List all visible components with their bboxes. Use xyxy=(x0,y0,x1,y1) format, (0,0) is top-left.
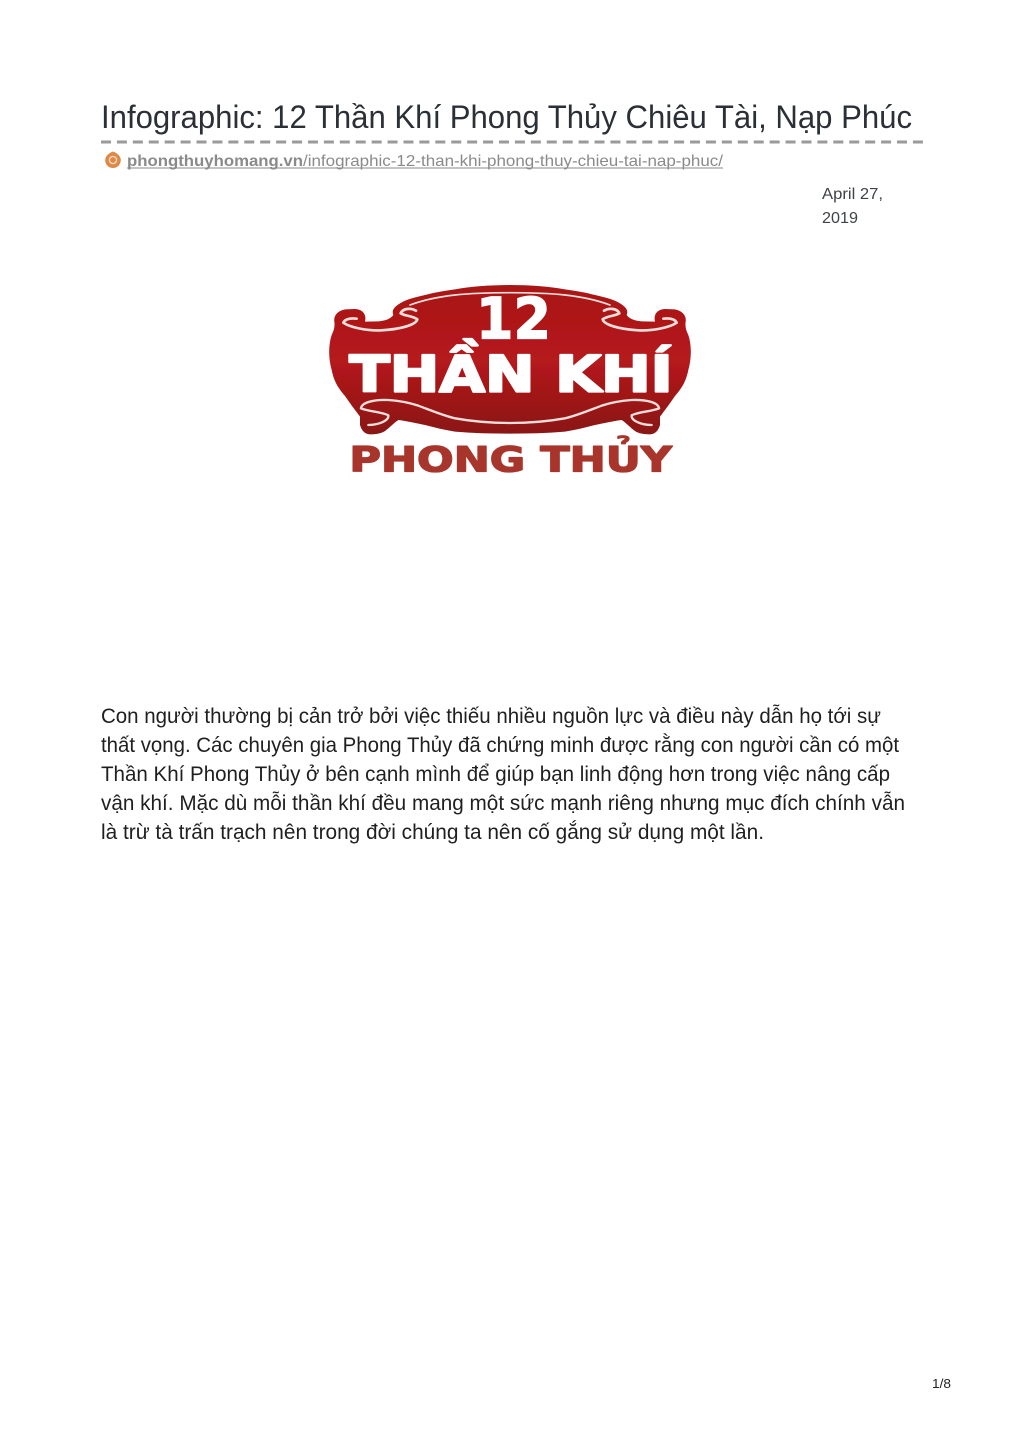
logo text phong thuy: PHONG THỦY xyxy=(349,437,673,481)
body paragraph: thất vọng. Các chuyên gia Phong Thủy đã chứng minh được rằng con người cần có một xyxy=(101,734,899,757)
icon: site favicon xyxy=(105,152,121,168)
dashed title divider xyxy=(101,140,923,144)
title: Infographic: 12 Thần Khí Phong Thủy Chiêu Tài, Nạp Phúc xyxy=(101,99,912,135)
body paragraph: Con người thường bị cản trở bởi việc thiếu nhiều nguồn lực và điều này dẫn họ tới sự xyxy=(101,705,881,728)
publication date: April 27, xyxy=(822,186,883,203)
logo number 12: 12 xyxy=(476,286,551,352)
body paragraph xyxy=(101,705,905,844)
source link: /infographic-12-than-khi-phong-thuy-chieu-tai-nap-phuc/ xyxy=(303,153,724,170)
body paragraph: là trừ tà trấn trạch nên trong đời chúng ta nên cố gắng sử dụng một lần. xyxy=(101,821,764,844)
logo upper ornament xyxy=(343,293,677,330)
page number: 1/8 xyxy=(932,1376,951,1391)
logo lower ornament xyxy=(361,400,659,425)
logo: 12 Thần Khí Phong Thủy xyxy=(329,285,691,481)
body paragraph: vận khí. Mặc dù mỗi thần khí đều mang một sức mạnh riêng nhưng mục đích chính vẫn xyxy=(101,792,905,815)
source link: phongthuyhomang.vn xyxy=(127,153,303,170)
logo text than khi: THẦN KHÍ xyxy=(349,339,673,404)
publication date xyxy=(822,186,883,227)
source link xyxy=(127,153,724,170)
logo plaque xyxy=(329,285,691,434)
body paragraph: Thần Khí Phong Thủy ở bên cạnh mình để giúp bạn linh động hơn trong việc nâng cấp xyxy=(101,763,890,786)
publication date: 2019 xyxy=(822,210,858,227)
